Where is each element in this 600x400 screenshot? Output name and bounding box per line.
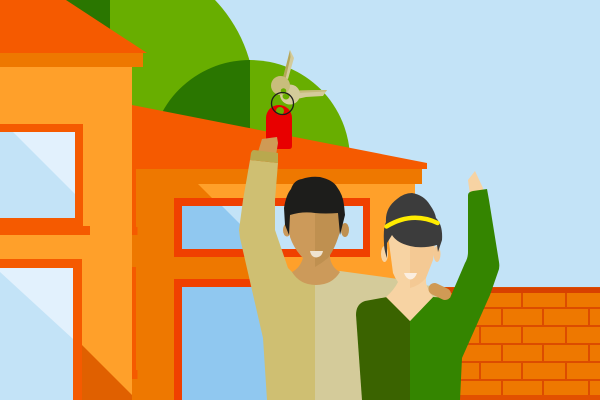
back house <box>132 105 427 400</box>
tag hole <box>276 107 284 115</box>
man neck <box>292 250 340 285</box>
woman <box>356 171 499 400</box>
front house lower window <box>0 259 82 400</box>
key pointing right <box>280 84 327 104</box>
man hand raised <box>258 137 278 155</box>
woman neck <box>386 270 433 321</box>
man hair <box>284 177 345 235</box>
front house upper window <box>0 124 90 235</box>
back house upper window <box>174 198 370 257</box>
man smile <box>310 251 323 258</box>
red tag <box>266 105 292 149</box>
woman headband <box>386 218 438 226</box>
small tree <box>150 60 350 260</box>
keys and red key tag <box>266 50 327 149</box>
woman sweater <box>356 189 499 400</box>
woman face <box>388 235 436 288</box>
man ears <box>283 223 349 237</box>
big tree <box>0 0 255 245</box>
woman hair <box>384 193 442 258</box>
key pointing up <box>271 50 294 95</box>
man hand on woman shoulder <box>434 289 445 294</box>
wall edge strips <box>132 124 138 379</box>
man <box>239 137 440 400</box>
man shirt <box>239 160 440 400</box>
back house lower window <box>174 279 314 400</box>
woman smile <box>404 273 417 280</box>
key ring <box>272 92 294 114</box>
woman hand raised <box>468 171 484 195</box>
brick wall <box>430 287 600 400</box>
woman ears <box>381 246 440 262</box>
man face <box>288 205 343 267</box>
front house <box>0 0 147 400</box>
man cuff <box>250 150 278 163</box>
